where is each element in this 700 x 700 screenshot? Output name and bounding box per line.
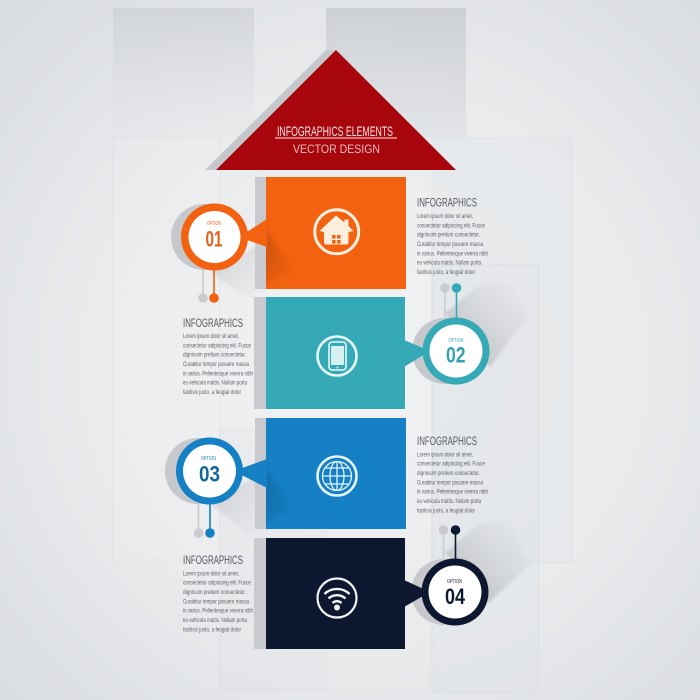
option 03 marker: OPTION (201, 456, 216, 462)
icon: phone (318, 336, 356, 376)
option 02 marker: OPTION (448, 338, 464, 344)
text block 1: Curabitur tempor posuere massa (417, 242, 483, 248)
text block 2 (183, 316, 253, 396)
text block 3: in varius. Pellentesque viverra nibh (417, 490, 488, 496)
text block 2: consectetur adipiscing elit. Fusce (183, 343, 251, 349)
text block 3: dignissim pretium consectetur. (417, 471, 480, 477)
text block 3: eu vehicula mattis. Nullam porta (417, 499, 481, 505)
text block 1: INFOGRAPHICS (417, 196, 477, 210)
option 01 marker: OPTION (207, 221, 221, 227)
text block 3 (417, 434, 488, 514)
text block 4: in varius. Pellentesque viverra nibh (183, 609, 253, 615)
text block 3: consectetur adipiscing elit. Fusce (417, 462, 485, 468)
text block 2: facilisis justo, a feugiat dolor (183, 390, 241, 396)
subtitle: VECTOR DESIGN (293, 144, 380, 156)
option 04 marker: 04 (445, 584, 466, 609)
text block 2: dignissim pretium consectetur. (183, 353, 246, 359)
panel: orange block 01 (255, 177, 406, 289)
icon: wifi (318, 578, 356, 618)
option 03 marker (165, 438, 267, 538)
text block 3: INFOGRAPHICS (417, 434, 477, 448)
option 03 marker: 03 (199, 462, 220, 487)
text block 1: Lorem ipsum dolor sit amet, (417, 214, 473, 220)
roof: red triangle heading (205, 50, 456, 170)
option 01 marker: 01 (206, 227, 222, 252)
text block 3: Lorem ipsum dolor sit amet, (417, 452, 473, 458)
text block 4: facilisis justo, a feugiat dolor (183, 627, 241, 633)
text block 1: facilisis justo, a feugiat dolor (417, 270, 475, 276)
text block 1: in varius. Pellentesque viverra nibh (417, 251, 488, 257)
text block 3: Curabitur tempor posuere massa (417, 480, 483, 486)
text block 4: dignissim pretium consectetur. (183, 590, 246, 596)
text block 2: in varius. Pellentesque viverra nibh (183, 371, 253, 377)
text block 2: Lorem ipsum dolor sit amet, (183, 334, 239, 340)
text block 1 (417, 196, 488, 276)
panel: blue block 03 (255, 418, 406, 529)
option 02 marker (404, 283, 490, 384)
text block 2: INFOGRAPHICS (183, 316, 243, 330)
text block 1: eu vehicula mattis. Nullam porta (417, 261, 481, 267)
text block 1: dignissim pretium consectetur. (417, 233, 480, 239)
panel: navy block 04 (254, 538, 405, 649)
roof triangle (216, 50, 456, 170)
text block 4: consectetur adipiscing elit. Fusce (183, 581, 251, 587)
option 04 marker: OPTION (447, 579, 462, 585)
background panels (113, 8, 572, 692)
roof shadow (205, 50, 336, 170)
text block 2: Curabitur tempor posuere massa (183, 362, 249, 368)
text block 4 (183, 553, 253, 633)
long shadows (210, 240, 530, 603)
text block 4: Lorem ipsum dolor sit amet, (183, 571, 239, 577)
text block 1: consectetur adipiscing elit. Fusce (417, 223, 485, 229)
text block 4: eu vehicula mattis. Nullam porta (183, 618, 247, 624)
option 04 marker (404, 525, 488, 626)
text block 3: facilisis justo, a feugiat dolor (417, 508, 475, 514)
icon: globe (318, 456, 356, 496)
icon: house (315, 210, 359, 254)
text block 4: Curabitur tempor posuere massa (183, 599, 249, 605)
panel: teal block 02 (254, 297, 405, 409)
text block 4: INFOGRAPHICS (183, 553, 243, 567)
title: INFOGRAPHICS ELEMENTS (277, 123, 393, 139)
option 02 marker: 02 (446, 343, 466, 368)
option 01 marker (171, 204, 267, 303)
text block 2: eu vehicula mattis. Nullam porta (183, 381, 247, 387)
